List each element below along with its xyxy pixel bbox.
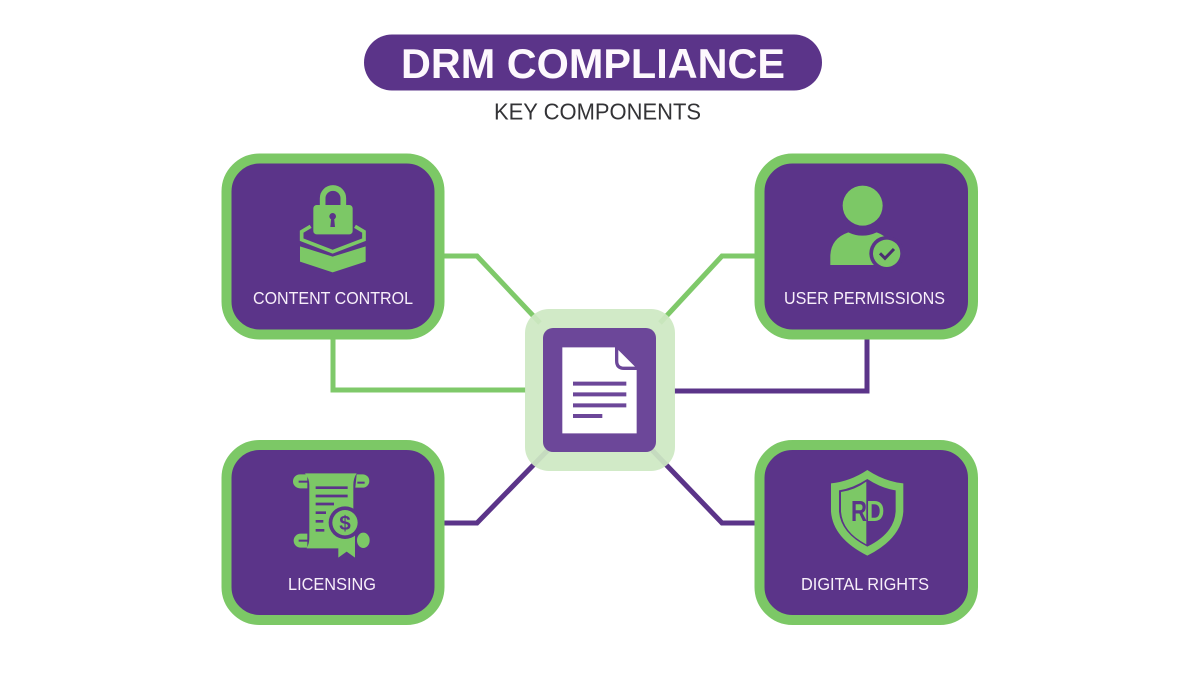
icon: licence scroll with dollar seal (293, 473, 370, 558)
icon: shield with RD monogram: D (866, 496, 884, 528)
connector: content control diagonal (440, 256, 540, 323)
connector: user permissions diagonal (660, 256, 760, 323)
icon: shield with RD monogram: R (851, 496, 867, 528)
label: CONTENT CONTROL (253, 288, 413, 308)
panel: licensing (226, 445, 440, 620)
panel: content control (226, 158, 440, 334)
icon: user with check (830, 186, 904, 271)
label: LICENSING (288, 574, 376, 594)
icon: licence scroll with dollar seal: $ (339, 512, 351, 535)
panel: user permissions (760, 158, 973, 334)
icon: document (562, 347, 637, 433)
label: USER PERMISSIONS (784, 288, 945, 308)
icon: padlock on box (300, 188, 366, 272)
panel: digital rights (760, 445, 973, 620)
connector: content control elbow (333, 335, 526, 390)
central document hub (525, 309, 675, 471)
icon: shield with RD monogram (831, 470, 903, 556)
subtitle: KEY COMPONENTS (494, 98, 701, 124)
connector: licensing diagonal (440, 450, 548, 523)
label: DIGITAL RIGHTS (801, 574, 929, 594)
connector: digital rights diagonal (652, 450, 760, 523)
title banner: DRM COMPLIANCE (401, 40, 785, 87)
connector: user permissions elbow (674, 335, 867, 391)
